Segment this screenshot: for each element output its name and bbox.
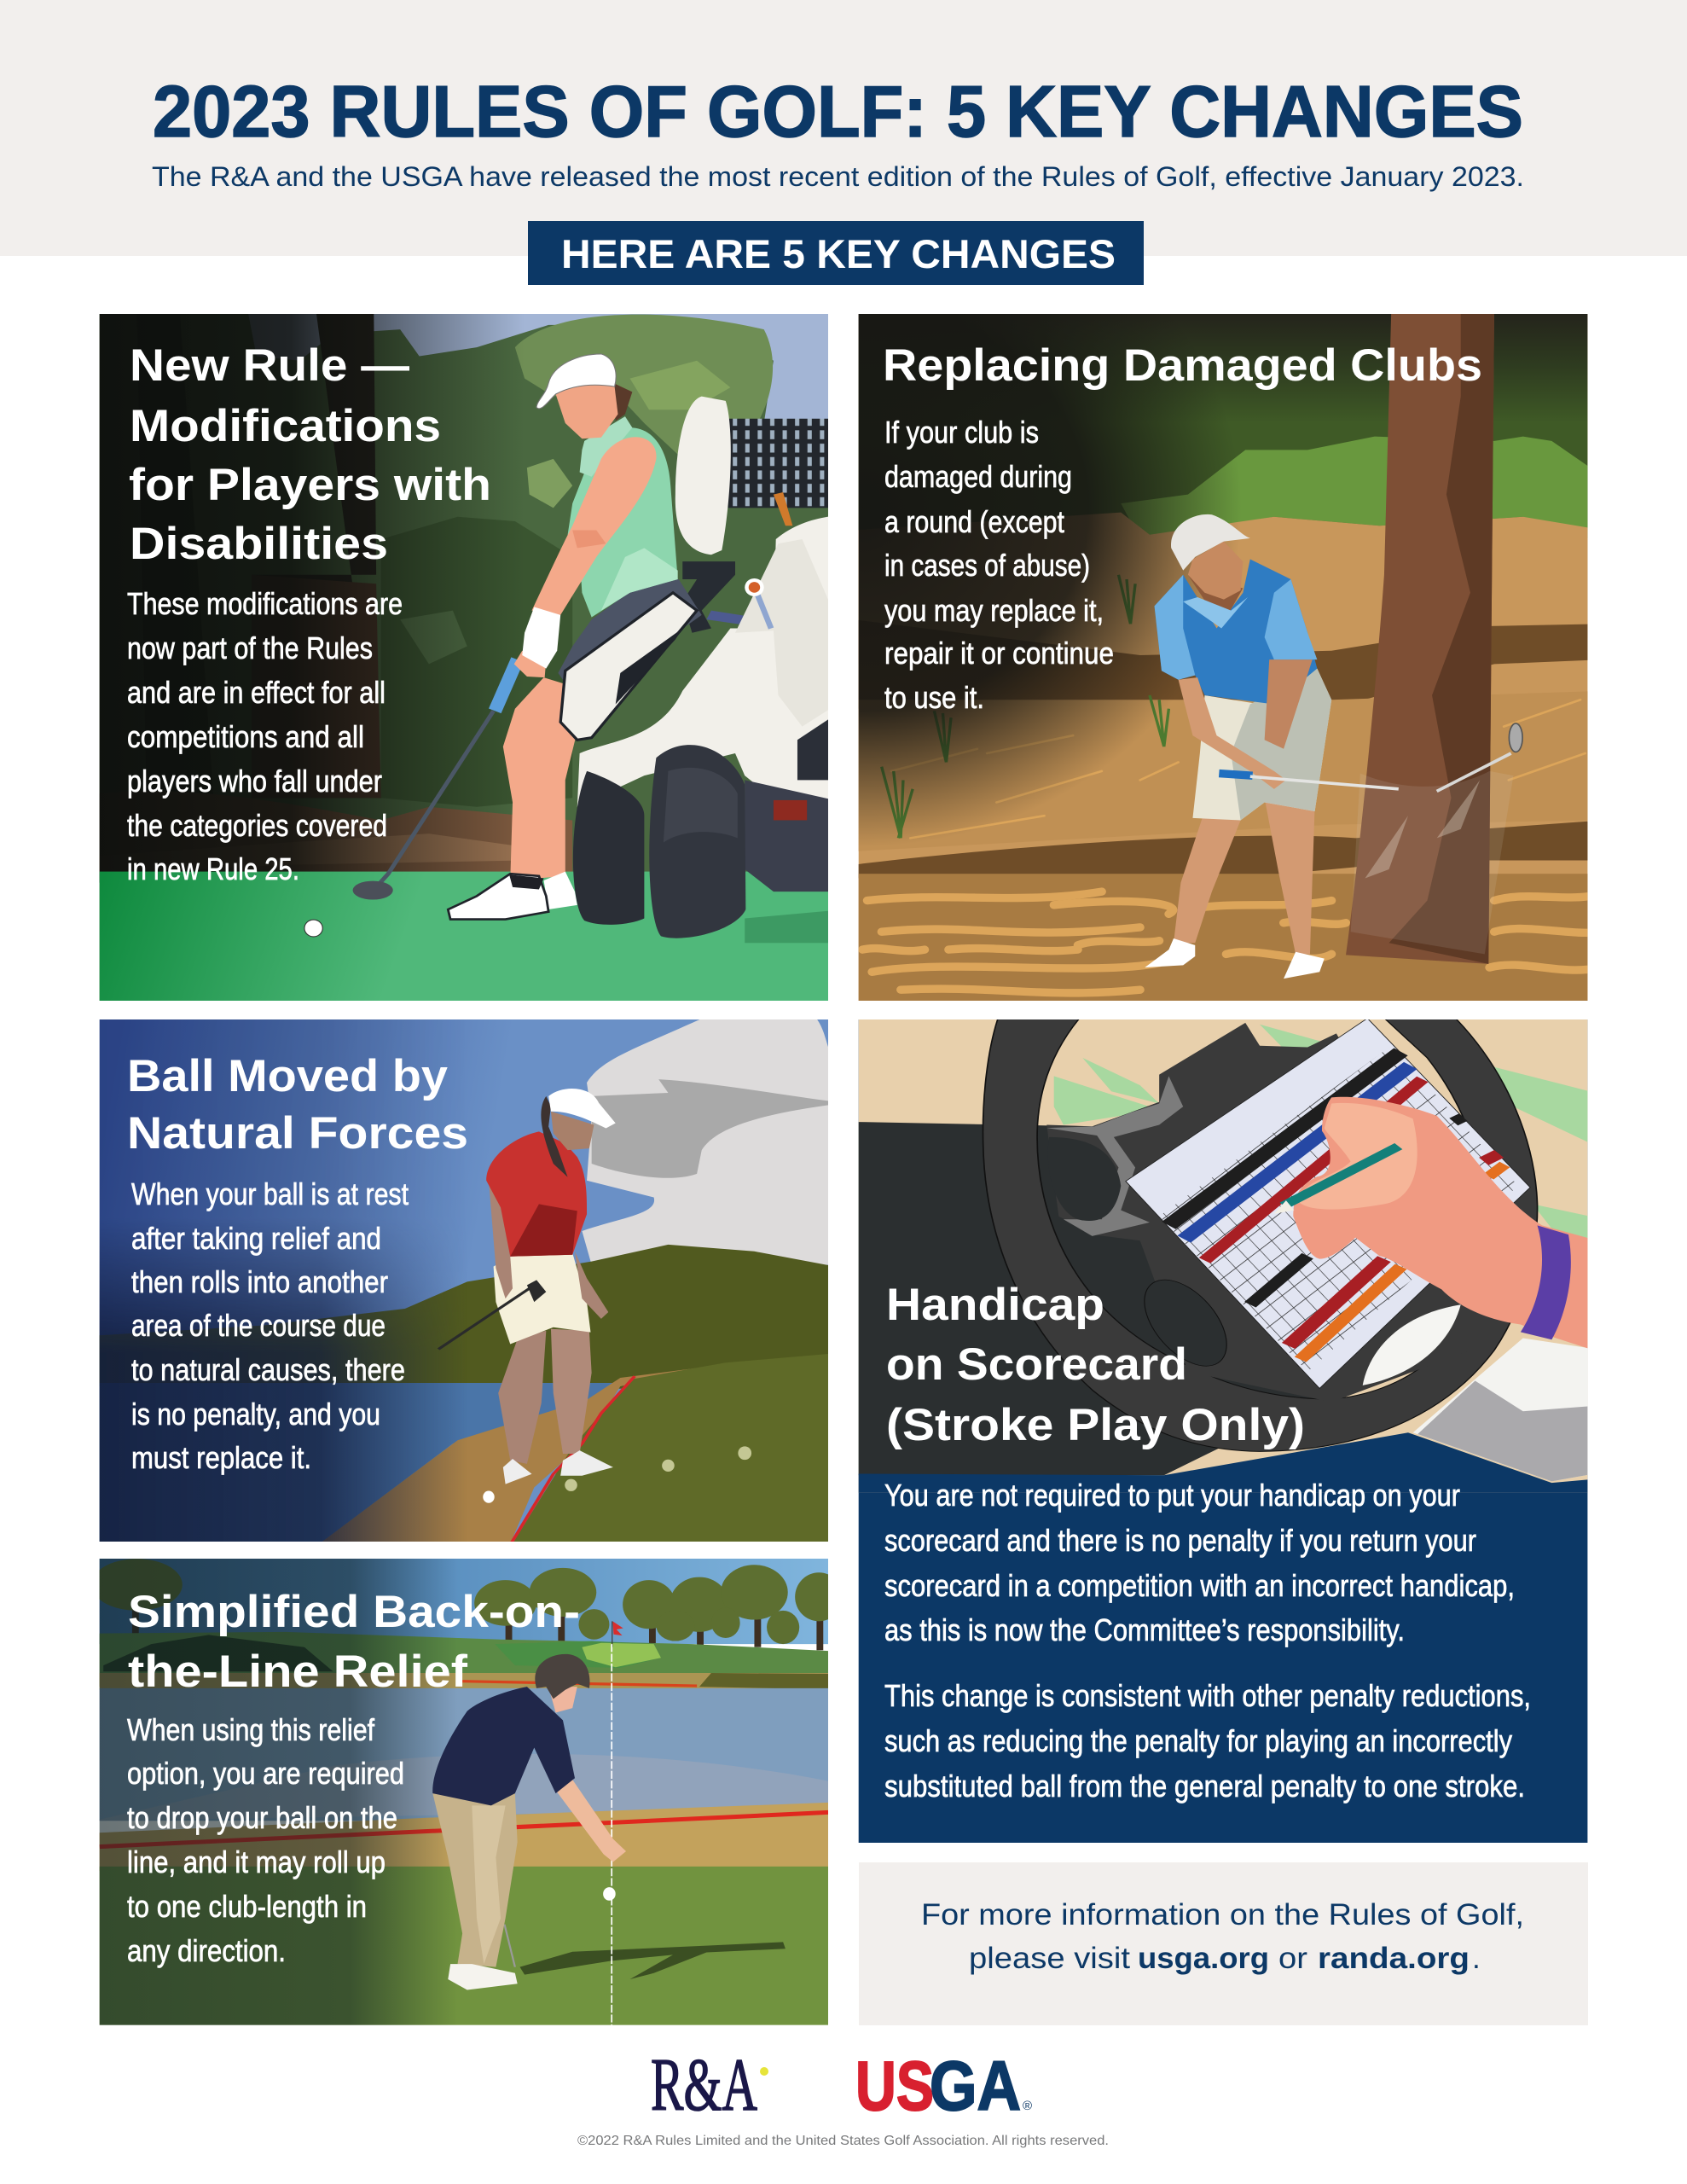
illustration: hand writing on scorecard on steering wheel — [853, 1009, 1603, 1493]
heading: for Players with — [129, 460, 491, 510]
body text: to drop your ball on the — [127, 1800, 397, 1835]
body text — [884, 1478, 1531, 1804]
illustration: golfer hitting tree — [853, 307, 1603, 1007]
heading: Disabilities — [130, 519, 388, 569]
logo: R&A: R&A — [651, 2044, 757, 2127]
panel: more information call to action: usga.org — [1138, 1942, 1269, 1975]
body text: you may replace it, — [884, 593, 1104, 628]
flag — [612, 1621, 623, 1647]
heading — [886, 1280, 1305, 1450]
body text: When using this relief — [127, 1712, 375, 1747]
heading: the-Line Relief — [128, 1647, 467, 1697]
body text: scorecard and there is no penalty if you return your — [884, 1523, 1476, 1558]
body text — [884, 415, 1114, 715]
banner: here are 5 key changes — [528, 221, 1144, 285]
illustration: golfer dropping ball — [91, 1553, 844, 2031]
scorecard — [1126, 1019, 1530, 1388]
body text: to use it. — [884, 680, 984, 715]
panel: more information call to action: or — [1278, 1942, 1307, 1975]
panel: modifications for players with disabilities — [94, 307, 844, 1007]
body text: as this is now the Committee’s responsibility. — [884, 1612, 1405, 1647]
body text: players who fall under — [127, 764, 382, 799]
body text: area of the course due — [131, 1308, 386, 1343]
body text: line, and it may roll up — [127, 1844, 386, 1879]
body text: after taking relief and — [131, 1221, 381, 1256]
body text: in new Rule 25. — [127, 851, 299, 886]
heading — [129, 340, 491, 569]
body text: damaged during — [884, 459, 1072, 494]
balls — [483, 1446, 751, 1503]
body text: scorecard in a competition with an incorrect handicap, — [884, 1568, 1515, 1603]
heading: Simplified Back-on- — [128, 1587, 580, 1637]
body text — [131, 1176, 409, 1475]
logo: USGA: GA — [930, 2048, 1021, 2125]
body text: a round (except — [884, 504, 1064, 539]
heading: New Rule — — [130, 340, 409, 391]
body text: such as reducing the penalty for playing an incorrectly — [884, 1723, 1512, 1758]
header band — [0, 0, 1687, 256]
body text: and are in effect for all — [127, 675, 386, 710]
panel: replacing damaged clubs — [853, 307, 1603, 1007]
ball — [603, 1887, 616, 1901]
body text: in cases of abuse) — [884, 548, 1090, 583]
heading: on Scorecard — [886, 1339, 1187, 1390]
body text: substituted ball from the general penalty to one stroke. — [884, 1769, 1525, 1804]
banner: here are 5 key changes: HERE ARE 5 KEY CHANGES — [561, 231, 1116, 276]
heading: Ball Moved by — [127, 1051, 449, 1101]
golfer figure — [448, 354, 702, 920]
body text: You are not required to put your handicap on your — [884, 1478, 1460, 1513]
title: 2023 RULES OF GOLF: 5 KEY CHANGES — [153, 72, 1523, 153]
body text: to natural causes, there — [131, 1352, 405, 1387]
panel: more information call to action: please visit — [969, 1942, 1130, 1975]
body text: is no penalty, and you — [131, 1397, 380, 1432]
illustration: golfer with mobility cart — [94, 307, 844, 1007]
heading — [128, 1594, 578, 1687]
body text — [127, 1712, 404, 1968]
body text: These modifications are — [127, 586, 403, 621]
trees — [91, 1559, 843, 1650]
body text: If your club is — [884, 415, 1039, 450]
hand — [1274, 1097, 1603, 1353]
heading — [130, 1058, 467, 1148]
panel: simplified back-on-the-line relief — [91, 1553, 844, 2031]
body text: This change is consistent with other penalty reductions, — [884, 1678, 1531, 1713]
navy edge — [853, 1432, 1603, 1493]
golfer figure — [432, 1654, 626, 1989]
body text: now part of the Rules — [127, 630, 373, 665]
body text: competitions and all — [127, 719, 364, 754]
heading: Natural Forces — [127, 1108, 468, 1159]
logo: USGA: ® — [1023, 2099, 1032, 2113]
body text: the categories covered — [127, 808, 387, 843]
golfer figure — [1145, 514, 1522, 979]
copyright: ©2022 R&A Rules Limited and the United States Golf Association. All rights reserved. — [577, 2134, 1109, 2148]
steering wheel — [983, 1009, 1538, 1451]
sleeve — [1413, 1339, 1603, 1481]
body text: any direction. — [127, 1933, 286, 1968]
body text: must replace it. — [131, 1440, 311, 1475]
golfer figure — [438, 1089, 616, 1484]
body text: to one club-length in — [127, 1889, 367, 1924]
ball — [304, 920, 322, 937]
body text — [127, 586, 403, 886]
illustration: golfer beside water — [94, 1015, 844, 1555]
panel: handicap on scorecard — [853, 1009, 1603, 1843]
subtitle: The R&A and the USGA have released the most recent edition of the Rules of Golf, effective January 2023. — [152, 161, 1524, 192]
panel: more information call to action: randa.org — [1318, 1942, 1470, 1975]
heading: Replacing Damaged Clubs — [883, 340, 1482, 391]
body text: When your ball is at rest — [131, 1176, 409, 1211]
panel: ball moved by natural forces — [94, 1015, 844, 1555]
dashboard — [853, 1102, 1331, 1475]
panel: more information call to action: . — [1472, 1942, 1481, 1975]
panel: more information call to action — [859, 1862, 1588, 2025]
putter — [353, 659, 518, 900]
body text: repair it or continue — [884, 636, 1114, 671]
logo: USGA — [855, 2048, 1032, 2125]
heading: Modifications — [130, 401, 441, 451]
logo: USGA: US — [855, 2048, 934, 2125]
mobility cart — [573, 397, 844, 938]
tree trunk — [1346, 307, 1513, 964]
body text: option, you are required — [127, 1756, 404, 1791]
heading: Handicap — [886, 1280, 1104, 1330]
heading: (Stroke Play Only) — [886, 1400, 1305, 1450]
body text: then rolls into another — [131, 1264, 388, 1299]
panel: more information call to action: For more information on the Rules of Golf, — [921, 1898, 1524, 1931]
